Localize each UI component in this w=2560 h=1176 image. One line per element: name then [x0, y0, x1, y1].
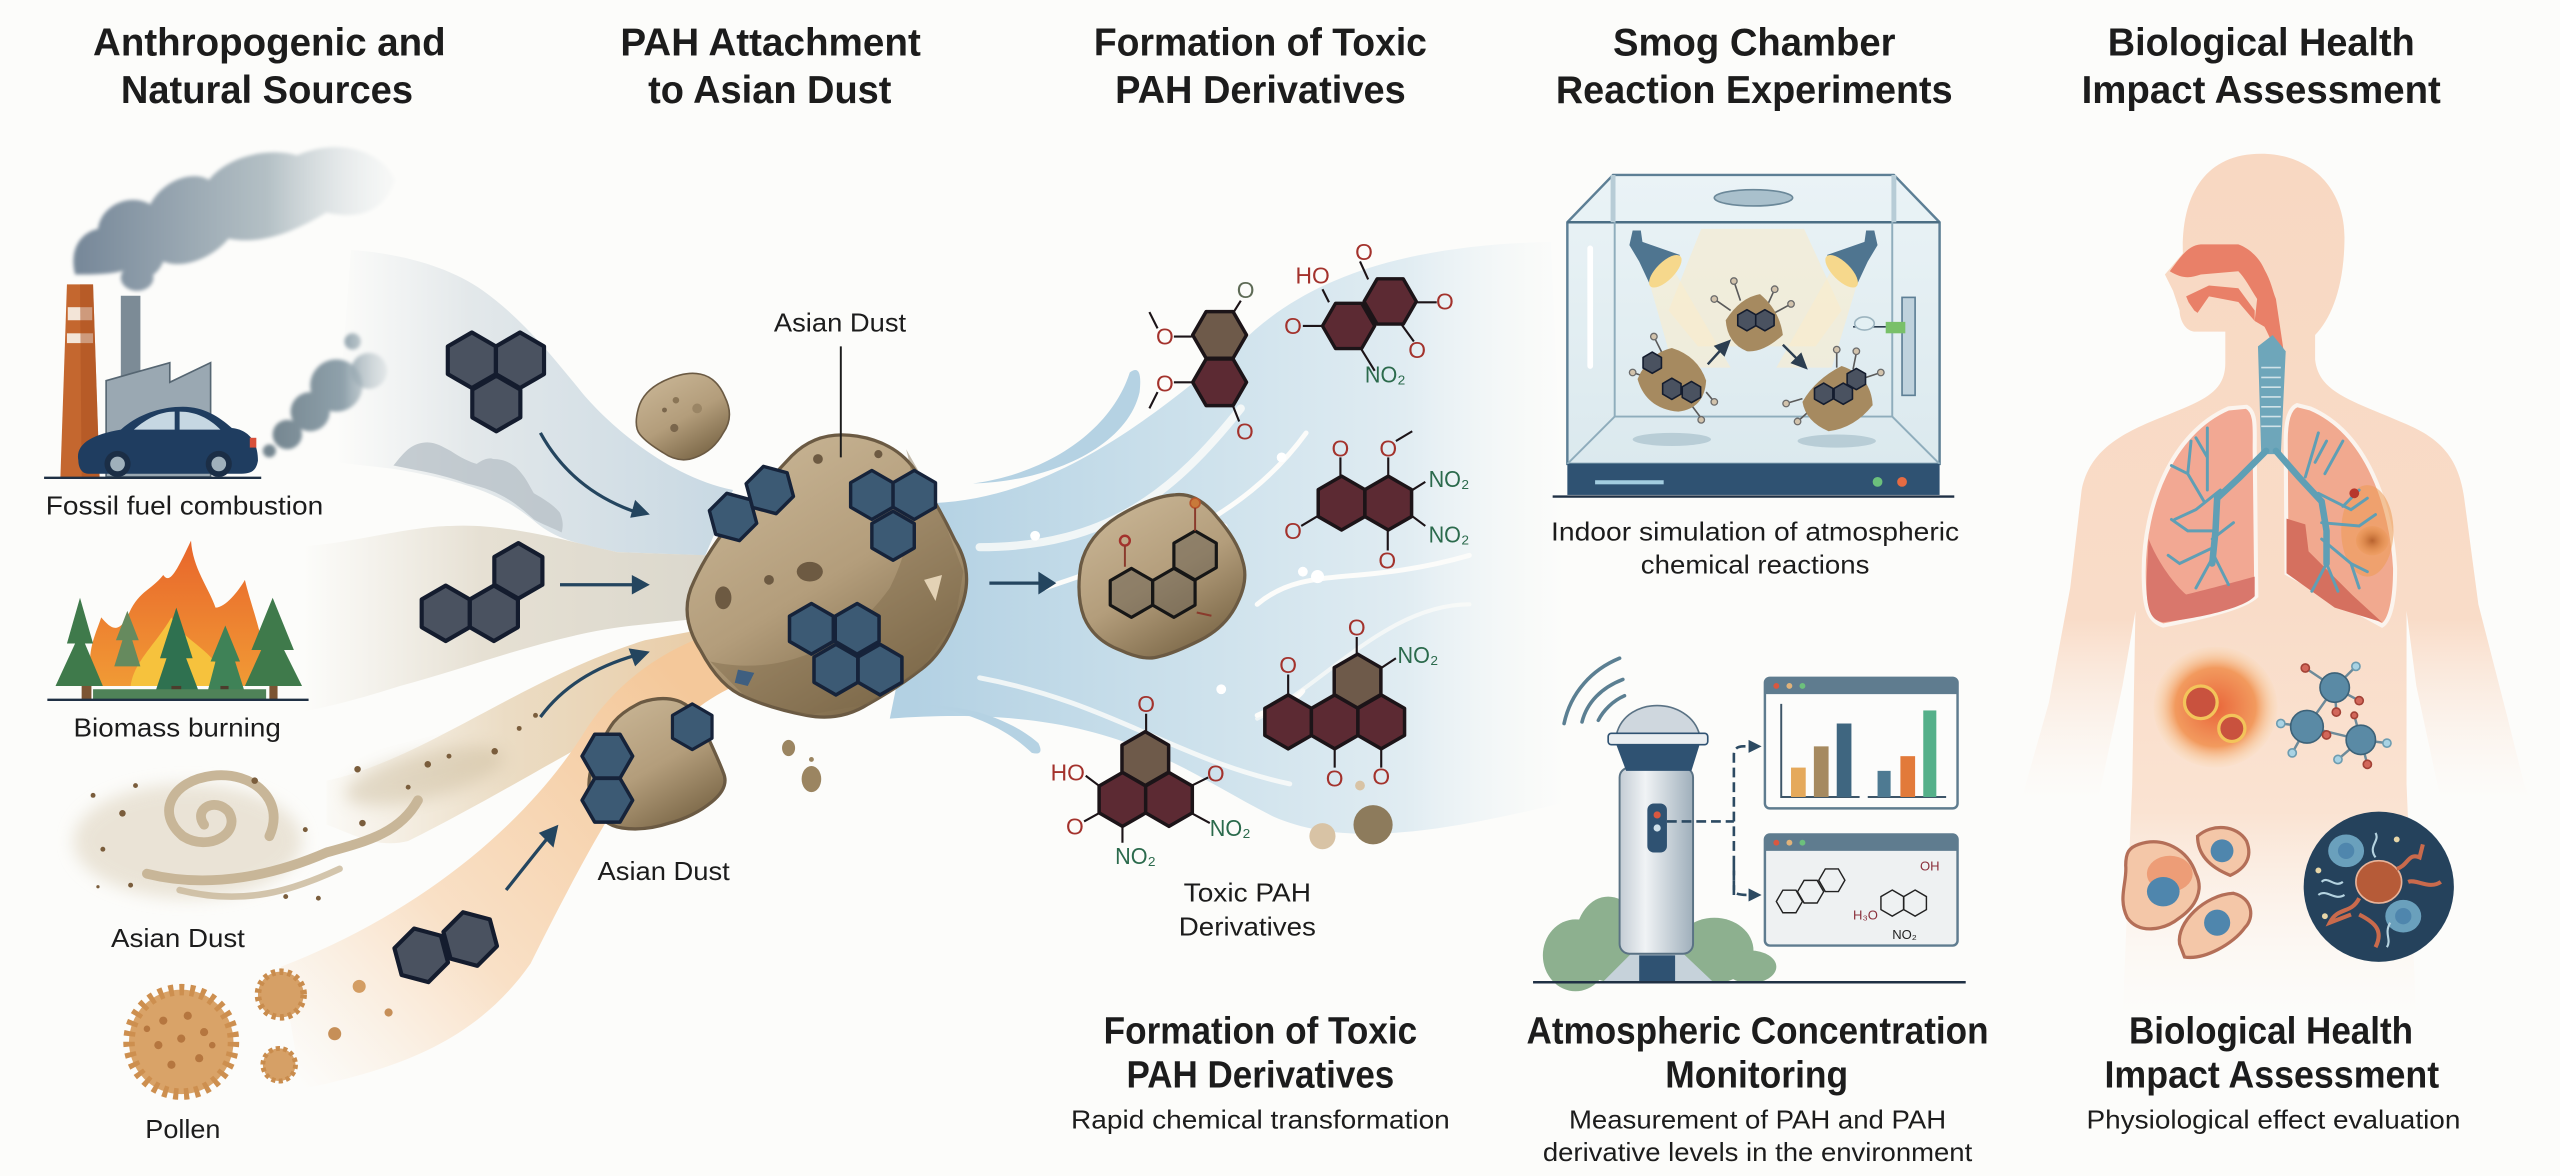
lamp right	[1820, 230, 1878, 293]
molecule: derivative lower right: O	[1372, 764, 1390, 790]
icon: small dust rock	[636, 373, 729, 460]
tower head	[1608, 706, 1708, 771]
bronchial trees	[2168, 428, 2376, 591]
left lung	[2144, 407, 2256, 626]
arrowheads	[539, 500, 1056, 848]
heading: health bottom: Impact Assessment	[2104, 1054, 2440, 1096]
icon: car	[78, 407, 258, 477]
molecule: derivative middle right: NO₂	[1429, 466, 1469, 492]
inflammation	[2153, 647, 2278, 768]
text: chamber caption	[1551, 517, 1959, 579]
text: monitoring caption: Measurement of PAH and PAH	[1569, 1104, 1946, 1134]
cells	[2123, 827, 2251, 957]
icon: chimney smoke	[73, 147, 395, 291]
flow: white streaks	[980, 408, 1469, 784]
heading: health bottom	[2104, 1010, 2440, 1096]
heading: health bottom: Biological Health	[2129, 1010, 2413, 1052]
flow: blue atmospheric stream	[890, 242, 1576, 834]
reaction arrows	[1708, 341, 1806, 368]
heading: formation bottom: PAH Derivatives	[1127, 1054, 1394, 1096]
ceiling port	[1714, 190, 1793, 206]
flow: orange pollen stream	[281, 629, 735, 1089]
tower indicator	[1647, 804, 1667, 852]
molecule: derivative middle right: O	[1378, 547, 1396, 573]
label: toxic PAH derivatives: Derivatives	[1179, 912, 1316, 942]
text: chamber caption: chemical reactions	[1641, 549, 1869, 579]
label: toxic PAH derivatives: Toxic PAH	[1184, 877, 1311, 907]
molecule: derivative top right: O	[1284, 313, 1302, 339]
connector arrowheads	[1749, 740, 1762, 901]
title: sources	[93, 22, 446, 112]
flow: tan dust stream	[327, 629, 705, 843]
label: biomass: Biomass burning	[73, 713, 281, 743]
molecule: derivative bottom: NO₂	[1210, 815, 1251, 841]
icon: dust rock with PAH bottom	[576, 699, 725, 833]
text: monitoring caption: derivative levels in the environment	[1543, 1137, 1973, 1167]
title: health impact	[2082, 22, 2441, 112]
right lung	[2286, 405, 2395, 626]
molecule: derivative middle right: O	[1284, 518, 1302, 544]
bushes	[1543, 897, 1776, 991]
chart window	[1765, 678, 1958, 808]
molecule: derivative bottom: NO₂	[1115, 843, 1156, 869]
flow: beige biomass stream	[300, 526, 710, 712]
molecule: inside body	[2277, 662, 2391, 768]
molecule: derivative top right: O	[1408, 337, 1426, 363]
panel: smog chamber	[1567, 175, 1940, 495]
molecule: derivative top right: O	[1355, 239, 1373, 265]
panel: monitoring station	[1543, 658, 1958, 991]
icon: dust crumbs	[782, 740, 1393, 849]
molecule: derivative top right: O	[1436, 289, 1454, 315]
flow: blue swirl accents	[927, 370, 1140, 754]
icon: pollen cluster	[129, 972, 393, 1094]
label: pollen: Pollen	[145, 1114, 220, 1144]
molecule: derivative lower right: NO₂	[1398, 642, 1438, 668]
arrows: into dust	[506, 433, 1042, 890]
label: asian dust left: Asian Dust	[111, 923, 246, 953]
title: health impact: Impact Assessment	[2082, 69, 2441, 112]
molecule: naphthalene	[391, 906, 501, 988]
title: sources: Natural Sources	[121, 69, 413, 112]
title: attachment: PAH Attachment	[620, 22, 921, 65]
decorative ground line chamber	[1553, 496, 1954, 498]
structure window: OH	[1920, 858, 1940, 873]
text: physiological: Physiological effect evaluation	[2087, 1104, 2460, 1134]
decorative ground line fossil	[44, 477, 261, 479]
icon: large dust rock with PAHs	[687, 435, 967, 717]
heading: monitoring: Atmospheric Concentration	[1527, 1010, 1989, 1052]
structure window: H₃O	[1853, 907, 1878, 922]
molecule: derivative bottom: O	[1137, 691, 1155, 717]
trachea	[2258, 335, 2286, 454]
light beams	[1649, 229, 1858, 368]
panel: human body	[2021, 154, 2531, 1021]
icon: factory	[60, 284, 211, 477]
molecule: derivative top right: NO₂	[1365, 361, 1406, 387]
molecule: derivative lower right: O	[1348, 614, 1366, 640]
molecule: derivative top right	[1284, 239, 1454, 387]
molecule: derivative bottom: O	[1066, 814, 1084, 840]
text: chamber caption: Indoor simulation of atmospheric	[1551, 517, 1959, 547]
title: health impact: Biological Health	[2108, 22, 2415, 65]
molecule: derivative top left: O	[1237, 277, 1255, 303]
flow: pollution cloud in stream	[393, 442, 563, 532]
title: smog chamber	[1556, 22, 1953, 112]
heading: monitoring: Monitoring	[1665, 1054, 1848, 1096]
particles with PAH	[1629, 278, 1884, 431]
title: attachment	[620, 22, 921, 112]
molecule: derivative middle right: O	[1379, 436, 1397, 462]
side sensor	[1853, 297, 1915, 395]
tower base	[1603, 952, 1713, 981]
molecule: derivative top right: HO	[1296, 263, 1330, 289]
title: attachment: to Asian Dust	[648, 69, 891, 112]
chamber frame	[1567, 175, 1940, 464]
icon: dust swirl	[73, 713, 538, 901]
molecule: derivative top left	[1149, 277, 1255, 444]
molecule: phenanthrene	[422, 543, 542, 641]
molecule: derivative top left: O	[1236, 418, 1254, 444]
decorative ground line fire	[47, 699, 309, 701]
molecule: derivative top left: O	[1156, 324, 1174, 350]
text: monitoring caption	[1543, 1104, 1973, 1167]
heading: monitoring	[1527, 1010, 1989, 1096]
label: asian dust callout: Asian Dust	[774, 308, 907, 338]
title: smog chamber: Reaction Experiments	[1556, 69, 1953, 112]
label: asian dust center: Asian Dust	[598, 856, 731, 886]
signal waves	[1564, 658, 1624, 724]
chamber base	[1567, 464, 1940, 495]
airway upper	[2170, 244, 2285, 363]
tumor spots	[2349, 488, 2389, 555]
molecule: derivative middle right: NO₂	[1429, 521, 1469, 547]
floor shadows	[1633, 433, 1876, 448]
flow: gray fossil stream	[335, 250, 733, 555]
title: toxic derivatives: PAH Derivatives	[1115, 69, 1406, 112]
molecule: derivative bottom: HO	[1051, 760, 1085, 786]
dashed connectors	[1667, 746, 1752, 895]
molecule: derivative lower right: O	[1326, 765, 1344, 791]
heading: formation bottom: Formation of Toxic	[1104, 1010, 1417, 1052]
torso lower	[2122, 604, 2416, 1021]
molecule: PAH trio	[448, 332, 544, 431]
decorative ground line monitor	[1533, 981, 1966, 983]
label: fossil fuel: Fossil fuel combustion	[46, 491, 323, 521]
structure window: NO₂	[1892, 927, 1917, 942]
icon: reacted dust rock	[1079, 495, 1245, 658]
icon: forest fire	[56, 541, 302, 699]
heading: formation bottom	[1104, 1010, 1417, 1096]
molecule: derivative top left: O	[1156, 370, 1174, 396]
title: sources: Anthropogenic and	[93, 22, 446, 65]
tower body	[1620, 768, 1693, 954]
title: smog chamber: Smog Chamber	[1613, 22, 1896, 65]
icon: car exhaust	[263, 333, 387, 457]
molecule: derivative lower right: O	[1279, 652, 1297, 678]
body silhouette	[2021, 154, 2531, 800]
molecule: derivative bottom: O	[1207, 760, 1225, 786]
text: rapid transformation: Rapid chemical transformation	[1071, 1104, 1450, 1134]
title: toxic derivatives: Formation of Toxic	[1094, 22, 1427, 65]
lamp left	[1629, 230, 1687, 293]
base controls	[1595, 477, 1907, 487]
title: toxic derivatives	[1094, 22, 1427, 112]
molecule: derivative lower right	[1265, 614, 1438, 791]
molecule: derivative bottom	[1051, 691, 1251, 869]
microscope view	[2304, 812, 2454, 962]
airway lower	[2186, 285, 2255, 321]
molecule: derivative middle right	[1284, 431, 1469, 573]
structure window	[1765, 835, 1958, 946]
chamber glass	[1567, 175, 1940, 464]
label: toxic PAH derivatives	[1179, 877, 1316, 942]
molecule: derivative middle right: O	[1332, 436, 1349, 462]
